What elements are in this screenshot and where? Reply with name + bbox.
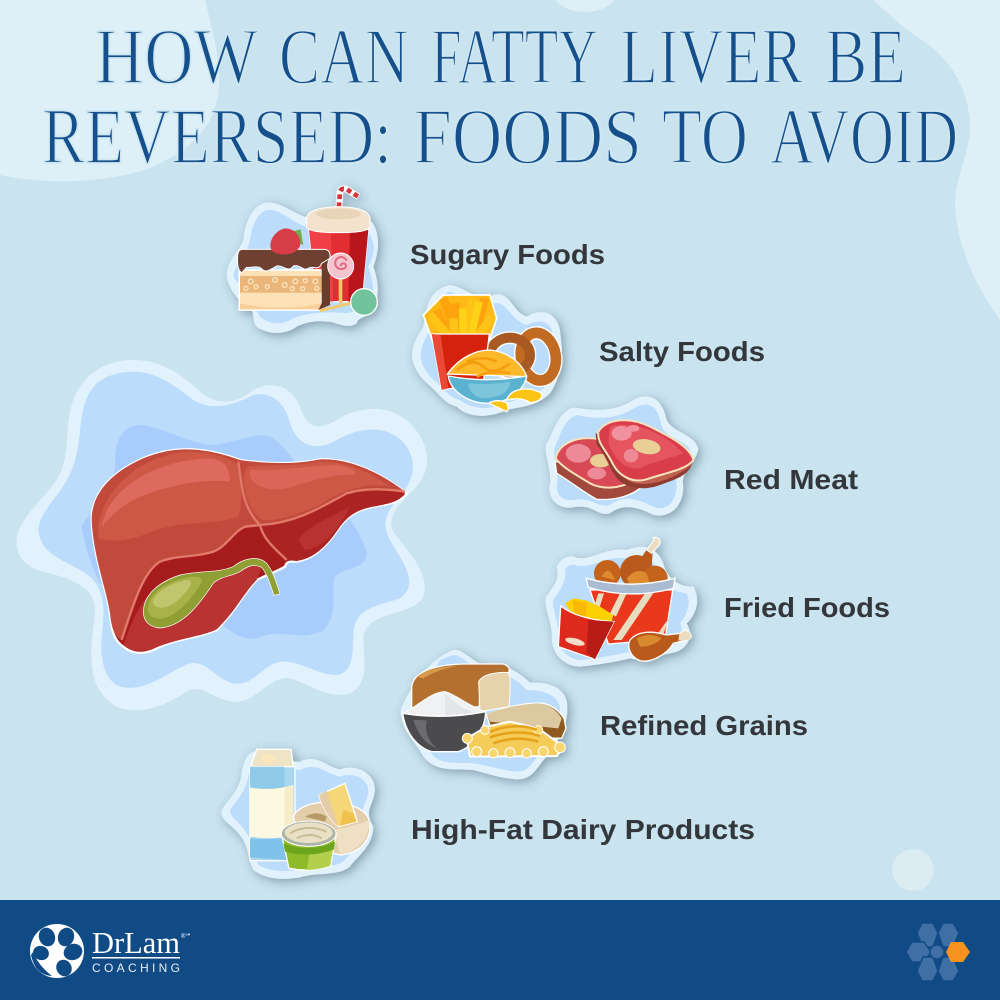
drink cup [307, 189, 370, 302]
label: Fried Foods [724, 592, 890, 623]
icon: flower mark [906, 923, 970, 981]
steak left [555, 438, 640, 500]
drumstick [629, 631, 691, 661]
cake slice [237, 249, 330, 310]
fries box [558, 598, 614, 659]
panel: liver illustration [16, 360, 427, 710]
logo: DrLam Coaching [30, 924, 192, 979]
milk carton [250, 749, 295, 861]
bowl of flour [403, 692, 486, 752]
lollipop [320, 253, 354, 311]
liver [92, 449, 407, 653]
strawberry [270, 228, 303, 255]
icon: refined grains sticker [401, 650, 567, 779]
title: TO [662, 94, 748, 181]
label: High-Fat Dairy Products [411, 814, 755, 845]
label: Sugary Foods [410, 239, 605, 270]
label: Red Meat [724, 464, 858, 495]
yogurt cup [281, 821, 336, 870]
title: FATTY [431, 14, 598, 101]
gallbladder [143, 559, 280, 628]
logo: DrLam Coaching: ®℠ [181, 933, 192, 940]
steak right [596, 420, 693, 488]
icon: salty foods sticker [412, 285, 562, 416]
logo: DrLam Coaching: COACHING [92, 961, 180, 975]
title: LIVER [620, 14, 803, 101]
pasta [462, 722, 565, 758]
icon: dairy sticker [221, 749, 375, 879]
label: Salty Foods [599, 336, 765, 367]
icon: red meat sticker [546, 397, 698, 516]
onion rings [490, 330, 560, 383]
title: REVERSED: [42, 94, 392, 181]
footer banner [0, 900, 1000, 1000]
title [42, 14, 958, 181]
title: BE [825, 14, 906, 101]
label: Refined Grains [600, 710, 808, 741]
title: CAN [279, 14, 409, 101]
logo: DrLam Coaching: DrLam [92, 925, 180, 960]
chicken bucket [586, 537, 675, 644]
icon: logo flower [30, 924, 85, 979]
bread loaf [412, 664, 510, 713]
candy ball [351, 289, 377, 315]
icon: sugary foods sticker [227, 189, 378, 333]
bread slice [487, 703, 566, 738]
loose chips [488, 389, 542, 412]
cheese [293, 783, 370, 855]
chip bowl [447, 350, 527, 403]
french fries [423, 295, 497, 343]
title: FOODS [413, 94, 642, 181]
icon: fried foods sticker [546, 537, 697, 667]
title: HOW [95, 14, 258, 101]
